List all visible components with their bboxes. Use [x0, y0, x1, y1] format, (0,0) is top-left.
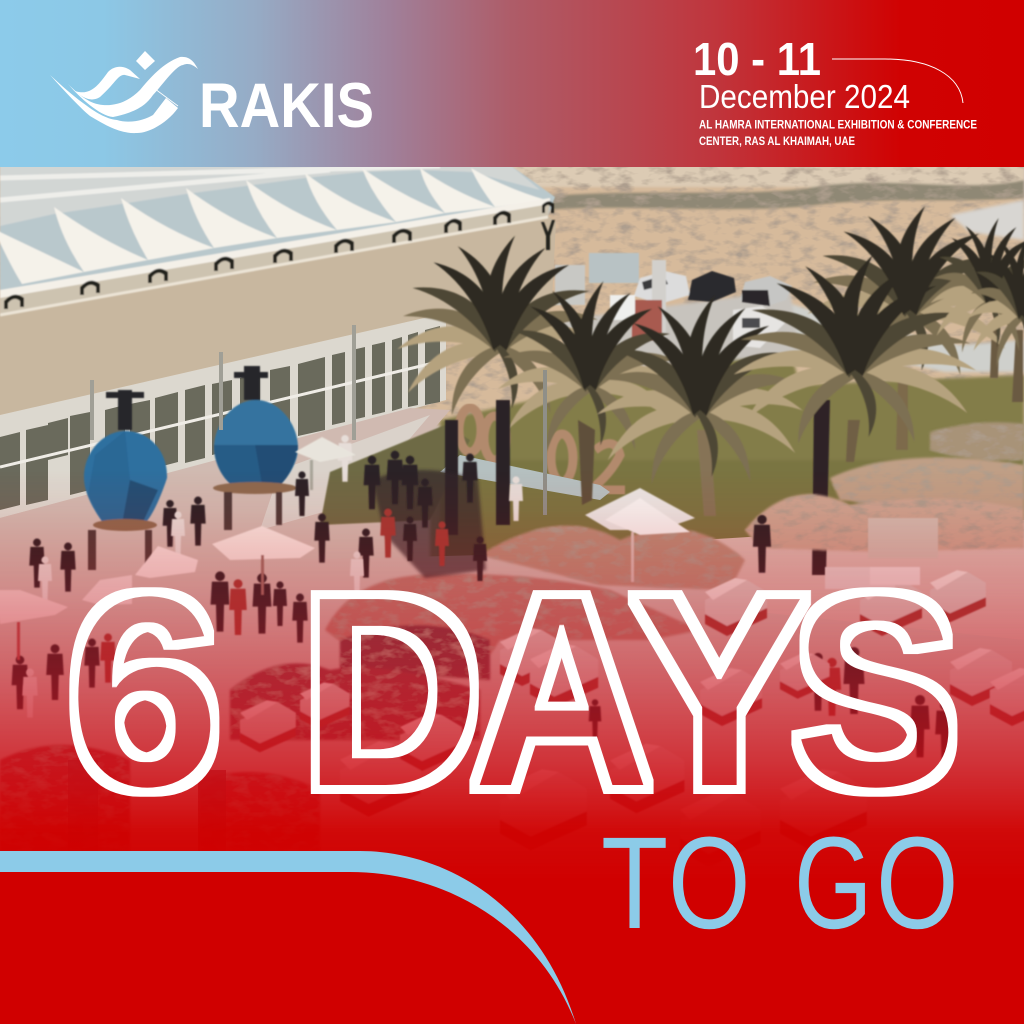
pavement [0, 408, 1024, 1024]
subheading: TO GO: O [876, 810, 959, 957]
icon: logo waves [50, 51, 198, 133]
event date and venue [693, 33, 977, 148]
crowd cluster shadow [372, 470, 486, 578]
bottom colour fade [0, 470, 1024, 880]
headline: 6 DAYS: D [301, 537, 482, 846]
lamp posts [92, 325, 545, 515]
ornamental grass [0, 422, 1024, 860]
venue line 2: CENTER, RAS AL KHAIMAH, UAE [699, 134, 855, 148]
venue line 1: AL HAMRA INTERNATIONAL EXHIBITION & CONFERENCE [699, 118, 977, 132]
palms [397, 204, 1024, 575]
decorative arc [832, 59, 963, 103]
desert terrain [0, 165, 1024, 425]
headline: 6 DAYS: 6 [66, 538, 223, 846]
parked cars and sign [555, 253, 792, 348]
blue swoosh [0, 851, 576, 1024]
lounge seating [240, 518, 1024, 867]
date numbers: 10 - 11 [693, 33, 821, 85]
RAKIS logo [50, 51, 374, 141]
letters sculpture [459, 408, 625, 490]
headline: 6 DAYS [66, 537, 960, 846]
blue spheres [84, 366, 298, 570]
bottom red panel [0, 872, 576, 1024]
lawn [430, 290, 1024, 570]
headline: 6 DAYS: Y [630, 537, 809, 846]
subheading: TO GO: O [668, 810, 751, 957]
subheading: TO GO: G [794, 809, 872, 956]
dark columns [445, 400, 510, 535]
headline: 6 DAYS: A [470, 538, 653, 846]
umbrellas [0, 437, 695, 660]
logo wordmark: RAKIS [199, 71, 374, 141]
date month: December 2024 [699, 78, 910, 115]
headline: 6 DAYS: S [791, 538, 960, 846]
building facade [0, 216, 556, 518]
subheading: TO GO: T [601, 809, 668, 956]
crowd [12, 451, 955, 762]
tent roof [0, 165, 555, 316]
tree trunks foreground [68, 760, 226, 860]
header gradient band [0, 0, 1024, 167]
subheading: TO GO [601, 809, 959, 957]
